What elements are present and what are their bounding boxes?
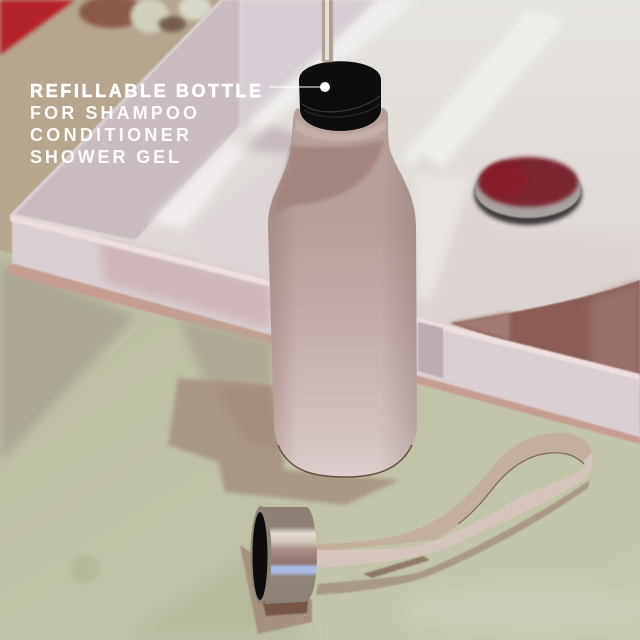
callout heading: REFILLABLE BOTTLE xyxy=(30,81,261,101)
tray floor light patches xyxy=(150,0,640,320)
cap contact shadow xyxy=(262,600,308,616)
tray inner back wall xyxy=(240,0,378,128)
disc face xyxy=(478,157,578,207)
pale upper shadow xyxy=(178,318,272,385)
strap shadow xyxy=(316,480,590,595)
bottle side shading xyxy=(268,113,417,477)
strap slit shadow xyxy=(363,556,430,578)
bottle xyxy=(268,0,417,477)
callout line 2: FOR SHAMPOO xyxy=(30,103,197,123)
callout line 3: CONDITIONER xyxy=(30,125,189,145)
callout label xyxy=(30,81,261,167)
cap band xyxy=(262,507,317,604)
background: red corner xyxy=(0,0,75,55)
disc base xyxy=(474,163,582,225)
cap left rim shade xyxy=(262,507,270,604)
tray inner left wall xyxy=(14,0,240,240)
tray rim highlight left xyxy=(12,0,222,215)
strap inner edge xyxy=(458,453,584,524)
bottle lid with thread xyxy=(299,61,381,131)
bottle base outline xyxy=(278,445,412,477)
strap front band xyxy=(316,452,593,568)
bottle shadow xyxy=(168,318,400,505)
background: blurred objects behind tray xyxy=(79,0,211,33)
table dull reflection at left xyxy=(0,262,135,463)
darker lower shadow xyxy=(168,378,400,505)
table reflections lower right xyxy=(400,584,640,636)
strap back loop xyxy=(316,433,592,552)
tray front wall xyxy=(12,216,640,438)
metal cap xyxy=(240,506,317,634)
bottle lip highlight xyxy=(295,118,387,141)
bottle body xyxy=(268,108,417,477)
table edge band xyxy=(6,264,640,444)
callout leader line with dot xyxy=(269,82,330,92)
strap xyxy=(316,433,593,595)
table surface xyxy=(0,250,640,640)
table smudge xyxy=(70,555,100,583)
tray interior xyxy=(10,0,640,385)
tray reflection: rose tint xyxy=(450,280,640,380)
bottle shoulder shadow xyxy=(272,140,385,220)
callout line 4: SHOWER GEL xyxy=(30,147,179,167)
cap shadow xyxy=(240,545,312,634)
cap opening xyxy=(250,506,272,604)
tray red disc xyxy=(474,157,582,225)
pipette rod xyxy=(322,0,333,62)
